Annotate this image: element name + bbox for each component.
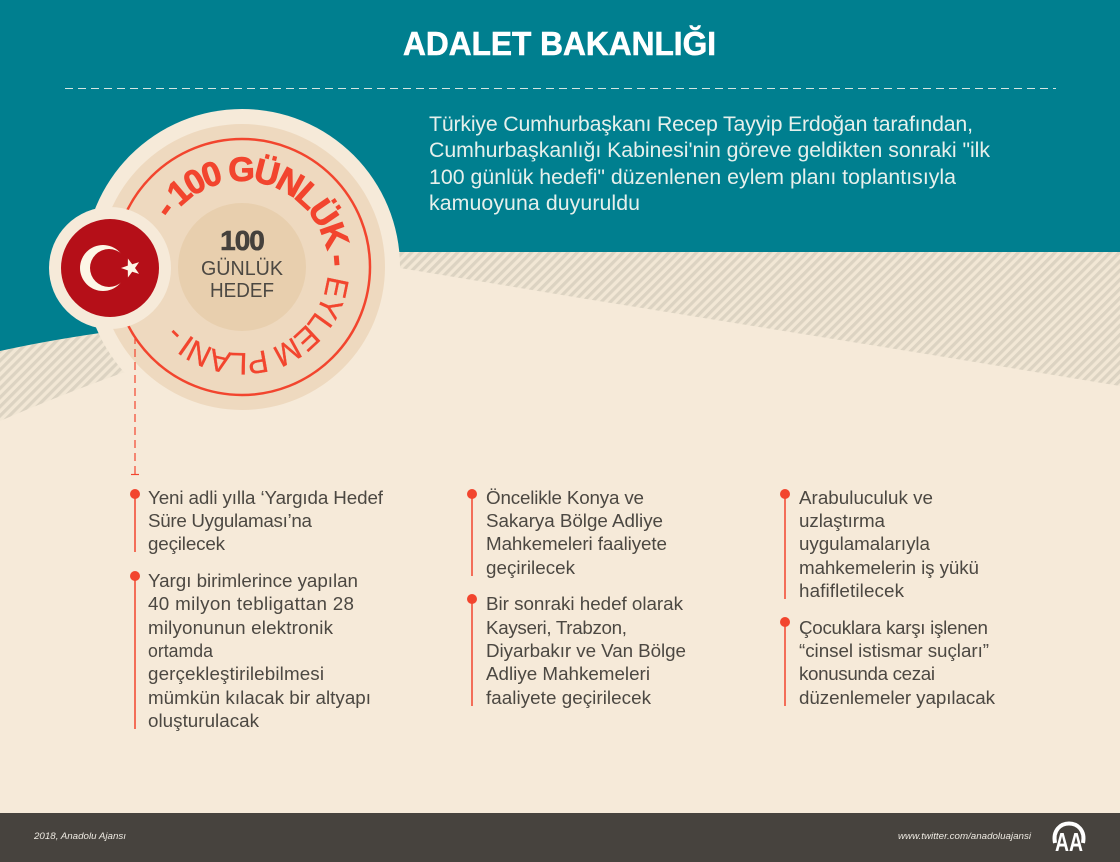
bullet 1: [130, 487, 384, 554]
bullet 2: mümkün kılacak bir altyapı: [148, 687, 371, 708]
bullet 2: gerçekleştirilebilmesi: [148, 663, 324, 684]
bullet 5: [780, 487, 979, 601]
bullet 3: geçirilecek: [486, 557, 576, 578]
twitter url: www.twitter.com/anadoluajansi: [898, 831, 1032, 842]
bullet 2: 40 milyon tebligattan 28: [148, 593, 354, 614]
bullet 5: Arabuluculuk ve: [799, 487, 933, 508]
hatched band: right: [395, 252, 1120, 386]
column 1: [130, 487, 384, 731]
bullet 6: Çocuklara karşı işlenen: [799, 617, 988, 638]
column 2: [467, 487, 686, 708]
bullet 2: oluşturulacak: [148, 710, 260, 731]
dashed connector: [131, 336, 139, 474]
ring text: bold: - 100 GÜNLÜK -: [162, 154, 350, 266]
bullet 6: konusunda cezai: [799, 663, 935, 684]
bullet 1: geçilecek: [148, 533, 226, 554]
bullet 6: düzenlemeler yapılacak: [799, 687, 996, 708]
bullet 4: Adliye Mahkemeleri: [486, 663, 650, 684]
bullet 6: “cinsel istismar suçları”: [799, 640, 989, 661]
bullet 3: Öncelikle Konya ve: [486, 487, 644, 508]
intro text: Cumhurbaşkanlığı Kabinesi'nin göreve geldikten sonraki "ilk: [429, 138, 990, 162]
hatched band: left: [0, 330, 125, 421]
bullet 2: [130, 570, 371, 731]
centre label: [201, 225, 283, 302]
icon: AA logo: AA: [1055, 827, 1083, 857]
bullet 2: milyonunun elektronik: [148, 617, 334, 638]
intro text: [429, 112, 990, 215]
bullet 5: mahkemelerin iş yükü: [799, 557, 979, 578]
column 3: [780, 487, 996, 708]
bullet 5: uzlaştırma: [799, 510, 886, 531]
intro text: 100 günlük hedefi" düzenlenen eylem planı toplantısıyla: [429, 165, 956, 189]
bullet 2: ortamda: [148, 640, 214, 661]
centre label: GÜNLÜK: [201, 257, 283, 280]
credit: 2018, Anadolu Ajansı: [33, 831, 126, 842]
icon: AA logo: [1055, 824, 1083, 857]
bullet 2: Yargı birimlerince yapılan: [148, 570, 358, 591]
ring text: regular: EYLEM PLANI -: [172, 278, 349, 375]
bullet 4: Bir sonraki hedef olarak: [486, 593, 684, 614]
bullet 4: [467, 593, 686, 708]
bullet 3: Sakarya Bölge Adliye: [486, 510, 663, 531]
title: ADALET BAKANLIĞI: [403, 25, 716, 62]
bullet 4: Kayseri, Trabzon,: [486, 617, 627, 638]
bullet 4: faaliyete geçirilecek: [486, 687, 652, 708]
bullet 5: uygulamalarıyla: [799, 533, 931, 554]
centre label: HEDEF: [210, 279, 274, 302]
footer: [0, 813, 1120, 862]
bullet 5: hafifletilecek: [799, 580, 905, 601]
dashed divider: [65, 88, 1056, 90]
bullet 1: Süre Uygulaması’na: [148, 510, 313, 531]
centre label: 100: [220, 225, 264, 256]
badge: 100 günlük eylem planı: [95, 109, 400, 410]
bullet 1: Yeni adli yılla ‘Yargıda Hedef: [148, 487, 384, 508]
bullet 6: [780, 617, 996, 708]
bullet 3: [467, 487, 667, 578]
teal header: [0, 0, 1120, 351]
intro text: kamuoyuna duyuruldu: [429, 191, 640, 215]
bullet 3: Mahkemeleri faaliyete: [486, 533, 667, 554]
icon: turkish flag: [49, 207, 171, 329]
bullet 4: Diyarbakır ve Van Bölge: [486, 640, 686, 661]
intro text: Türkiye Cumhurbaşkanı Recep Tayyip Erdoğan tarafından,: [429, 112, 973, 136]
